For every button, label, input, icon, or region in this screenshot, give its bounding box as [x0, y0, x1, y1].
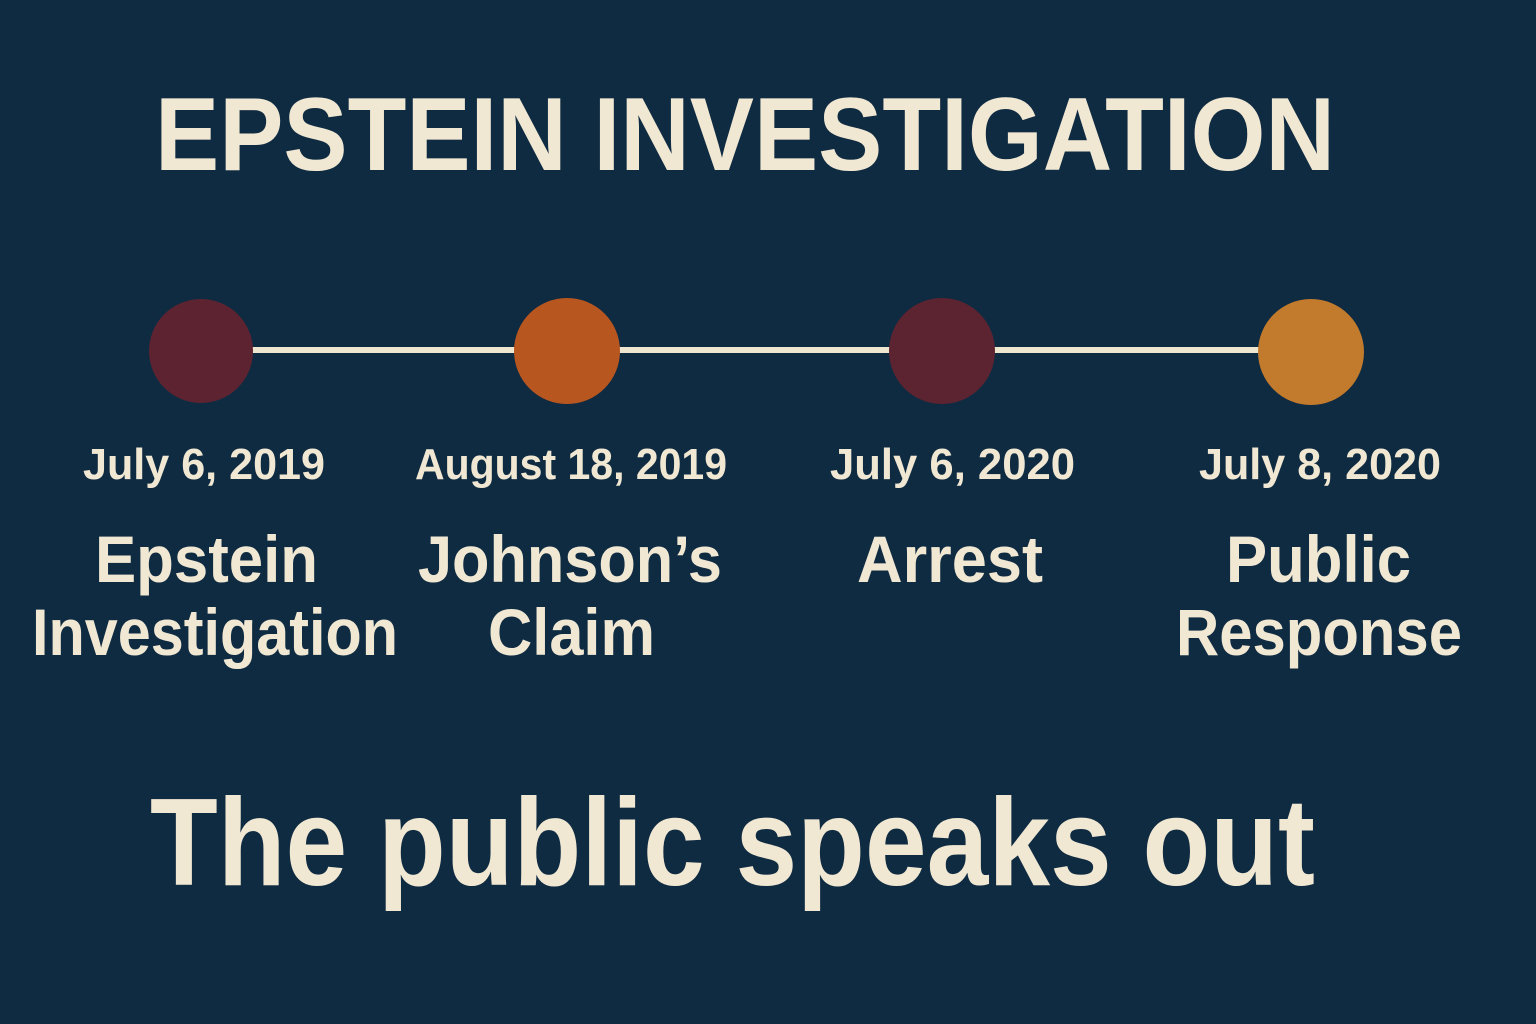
event 2: Johnson's Claim — [415, 440, 727, 669]
event 3: Arrest: Arrest — [857, 522, 1043, 596]
title: EPSTEIN INVESTIGATION — [155, 77, 1335, 193]
event 1: Epstein Investigation: Epstein — [95, 522, 318, 596]
event 4: Public Response — [1176, 440, 1462, 669]
event 4: Public Response: Public — [1226, 522, 1411, 596]
subtitle: The public speaks out — [150, 774, 1315, 912]
event 4: Public Response: Response — [1176, 595, 1462, 669]
event 1: Epstein Investigation — [32, 440, 398, 669]
node: July 8, 2020 — [1258, 299, 1364, 405]
node: July 6, 2020 — [889, 298, 995, 404]
timeline — [149, 298, 1364, 405]
event 3: Arrest — [830, 440, 1075, 596]
event 1: Epstein Investigation: Investigation — [32, 595, 398, 669]
event 3: Arrest: July 6, 2020 — [830, 440, 1075, 489]
event 2: Johnson's Claim: Johnson’s — [418, 522, 722, 596]
event 2: Johnson's Claim: Claim — [488, 595, 655, 669]
event 1: Epstein Investigation: July 6, 2019 — [83, 440, 325, 489]
node: August 18, 2019 — [514, 298, 620, 404]
event 2: Johnson's Claim: August 18, 2019 — [415, 440, 727, 489]
node: July 6, 2019 — [149, 299, 253, 403]
event 4: Public Response: July 8, 2020 — [1199, 440, 1441, 489]
